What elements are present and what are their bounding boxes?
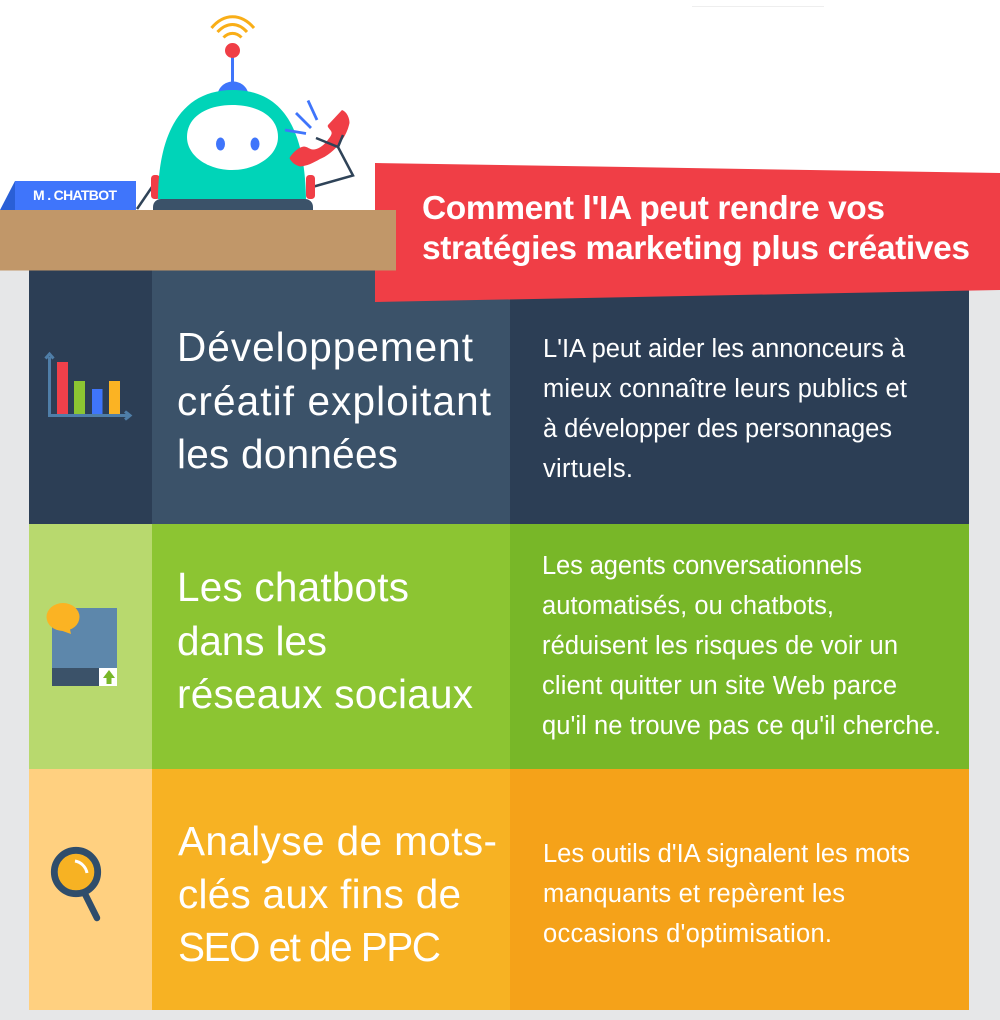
heading: keyword analysis: Analyse de mots- [178,818,497,864]
text block: chatbots reduce risk: Les agents conversationnels [542,552,862,580]
heading: chatbots on social networks: Les chatbots [177,564,409,610]
heading: chatbots on social networks: réseaux sociaux [177,671,473,717]
name plate: M. Chatbot: M . CHATBOT [33,187,117,203]
title: Comment l'IA peut rendre vos [422,190,885,227]
heading: keyword analysis [178,818,497,970]
text block: audience insights: virtuels. [543,455,633,483]
icon: social post with chat bubble [46,603,117,686]
text block: audience insights: à développer des personnages [543,415,892,443]
text block: audience insights [543,335,907,483]
icon: red telephone handset [290,110,350,166]
heading: chatbots on social networks [177,564,473,717]
heading: chatbots on social networks: dans les [177,618,327,664]
icon: magnifying glass [54,850,98,918]
icon: wifi signal [212,17,254,38]
title banner [375,163,1000,302]
panel: chatbots on social networks [29,524,969,769]
text block: chatbots reduce risk: qu'il ne trouve pas ce qu'il cherche. [542,712,941,740]
desk [0,210,396,270]
title [422,190,970,267]
text block: AI tools flag missing words [543,840,910,948]
text block: audience insights: mieux connaître leurs publics et [543,375,907,403]
panel: data-driven creative development [29,270,969,524]
robot character [137,17,353,210]
text block: AI tools flag missing words: manquants et repèrent les [543,880,845,908]
heading: data-driven creative development: Développement [177,324,473,370]
heading: keyword analysis: clés aux fins de [178,871,461,917]
name plate: M. Chatbot [0,181,136,210]
text block: chatbots reduce risk [542,552,941,740]
title: stratégies marketing plus créatives [422,230,970,267]
panel: keyword analysis [29,769,969,1010]
icon: bar chart [46,354,130,420]
heading: data-driven creative development [177,324,491,477]
text block: AI tools flag missing words: Les outils d'IA signalent les mots [543,840,910,868]
text block: audience insights: L'IA peut aider les annonceurs à [543,335,906,363]
heading: data-driven creative development: créatif exploitant [177,378,491,424]
text block: chatbots reduce risk: client quitter un site Web parce [542,672,897,700]
text block: chatbots reduce risk: réduisent les risques de voir un [542,632,898,660]
text block: AI tools flag missing words: occasions d'optimisation. [543,920,832,948]
heading: keyword analysis: SEO et de PPC [178,924,441,970]
text block: chatbots reduce risk: automatisés, ou chatbots, [542,592,834,620]
heading: data-driven creative development: les données [177,431,398,477]
